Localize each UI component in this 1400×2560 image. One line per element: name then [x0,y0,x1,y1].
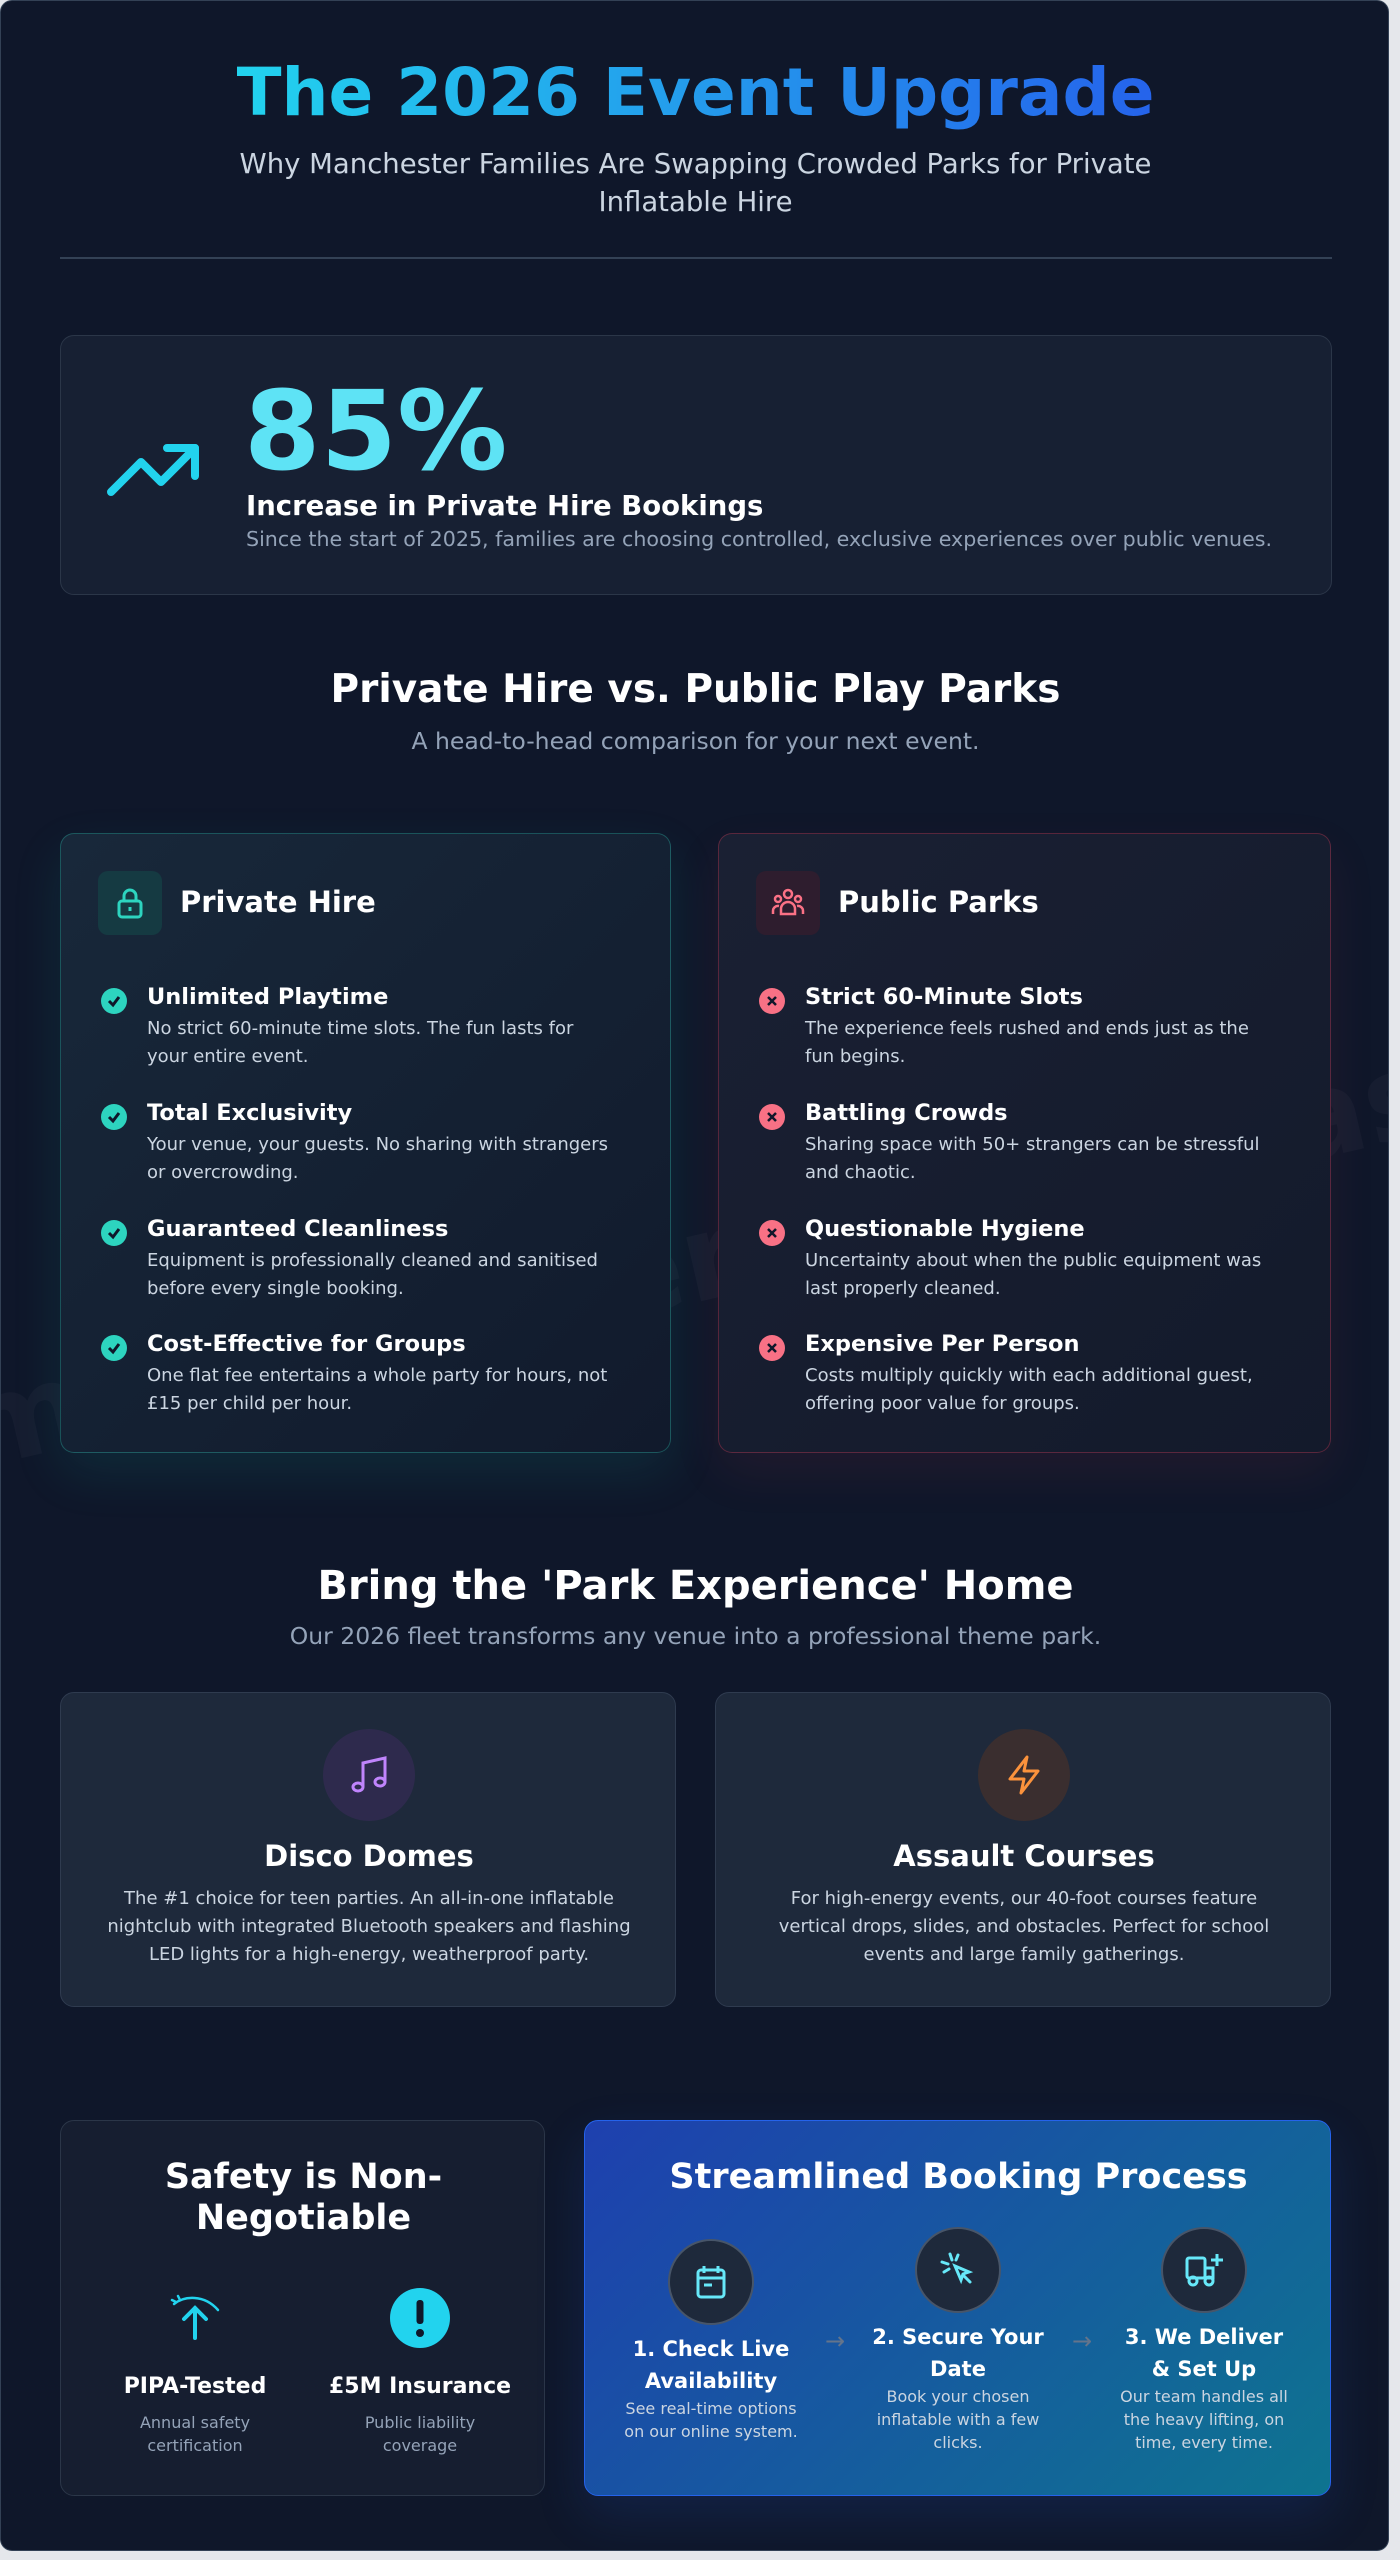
booking heading: Streamlined Booking Process [669,2157,1248,2197]
panel: public parks: Uncertainty about when the public equipment was last properly cleaned. [805,1250,1261,1299]
step 1: 1. Check Live Availability [633,2337,789,2393]
stat label: Increase in Private Hire Bookings [246,490,763,522]
panel: private hire [60,833,671,1453]
comparison subtitle: A head-to-head comparison for your next event. [411,727,980,755]
safety heading: Safety is Non- [165,2157,442,2197]
card text: The #1 choice for teen parties. An all-in-one inflatable nightclub with integrated Bluetooth speakers and flashing LED lights for a high-energy, weatherproof party. [107,1888,631,1965]
item [101,1216,598,1299]
badge: PIPA: Annual safety [140,2413,250,2432]
panel: private hire: Cost-Effective for Groups [147,1331,466,1357]
step 1: See real-time options on our online system. [624,2399,798,2441]
panel: public parks [718,833,1331,1453]
card title: Assault Courses [893,1839,1155,1873]
panel: public parks: Costs multiply quickly with each additional guest, offering poor value for groups. [805,1365,1253,1414]
badge: PIPA [124,2294,266,2455]
panel: public parks: The experience feels rushed and ends just as the fun begins. [805,1018,1249,1067]
panel: safety [60,2120,545,2496]
step 2: Book your chosen inflatable with a few clicks. [877,2387,1039,2452]
panel: private hire: One flat fee entertains a whole party for hours, not £15 per child per hour. [147,1365,607,1414]
item [759,1100,1260,1183]
item [759,1216,1261,1299]
step 3: 3. We Deliver & Set Up [1125,2325,1283,2381]
item [101,984,574,1067]
step 3 [1120,2227,1288,2452]
section heading: park experience: Bring the 'Park Experience' Home [317,1563,1074,1609]
panel heading: Public Parks [838,885,1039,919]
panel: public parks: Battling Crowds [805,1100,1008,1126]
badge: insurance: Public liability [365,2413,475,2432]
item [759,1331,1253,1414]
panel: private hire: No strict 60-minute time slots. The fun lasts for your entire event. [147,1018,573,1067]
item [101,1100,608,1183]
stat card [60,335,1332,595]
safety heading [165,2157,442,2238]
panel: public parks: Sharing space with 50+ strangers can be stressful and chaotic. [805,1134,1260,1183]
card: assault courses [715,1692,1331,2007]
panel: public parks: Strict 60-Minute Slots [805,984,1083,1010]
title: The 2026 Event Upgrade [236,54,1154,131]
arrow: → [825,2327,845,2355]
stat description: Since the start of 2025, families are choosing controlled, exclusive experiences over public venues. [246,527,1272,551]
icon: music [323,1729,415,1821]
panel: private hire: Your venue, your guests. No sharing with strangers or overcrowding. [147,1134,608,1183]
badge: insurance [329,2288,511,2455]
panel: public parks: Expensive Per Person [805,1331,1080,1357]
icon: trend up [107,444,199,496]
card text: For high-energy events, our 40-foot courses feature vertical drops, slides, and obstacles. Perfect for school events and large family gatherings. [779,1888,1269,1965]
step 2 [872,2227,1044,2452]
icon: lock [98,871,162,935]
badge: insurance: £5M Insurance [329,2374,511,2399]
stat number: 85% [244,367,507,495]
panel: public parks: Questionable Hygiene [805,1216,1085,1242]
panel: private hire: Unlimited Playtime [147,984,388,1010]
section heading: comparison: Private Hire vs. Public Play Parks [331,667,1060,712]
badge: PIPA: certification [147,2436,243,2455]
panel: booking process [584,2120,1331,2496]
arrow: → [1072,2327,1092,2355]
item [759,984,1249,1067]
item [101,1331,607,1414]
subtitle: Why Manchester Families Are Swapping Crowded Parks for Private Inflatable Hire [240,148,1151,218]
panel: private hire: Guaranteed Cleanliness [147,1216,448,1242]
icon: people [756,871,820,935]
step 3: Our team handles all the heavy lifting, on time, every time. [1120,2387,1288,2452]
step 1 [624,2239,798,2441]
badge: PIPA: PIPA-Tested [124,2374,266,2399]
step 2: 2. Secure Your Date [872,2325,1044,2381]
panel: private hire: Equipment is professionally cleaned and sanitised before every single booking. [147,1250,598,1299]
section subtitle: Our 2026 fleet transforms any venue into a professional theme park. [290,1622,1101,1650]
panel heading: Private Hire [180,885,376,919]
safety heading: Negotiable [196,2198,411,2238]
icon: lightning [978,1729,1070,1821]
card title: Disco Domes [264,1839,474,1873]
panel: private hire: Total Exclusivity [147,1100,352,1126]
badge: insurance: coverage [383,2436,457,2455]
card: disco domes [60,1692,676,2007]
